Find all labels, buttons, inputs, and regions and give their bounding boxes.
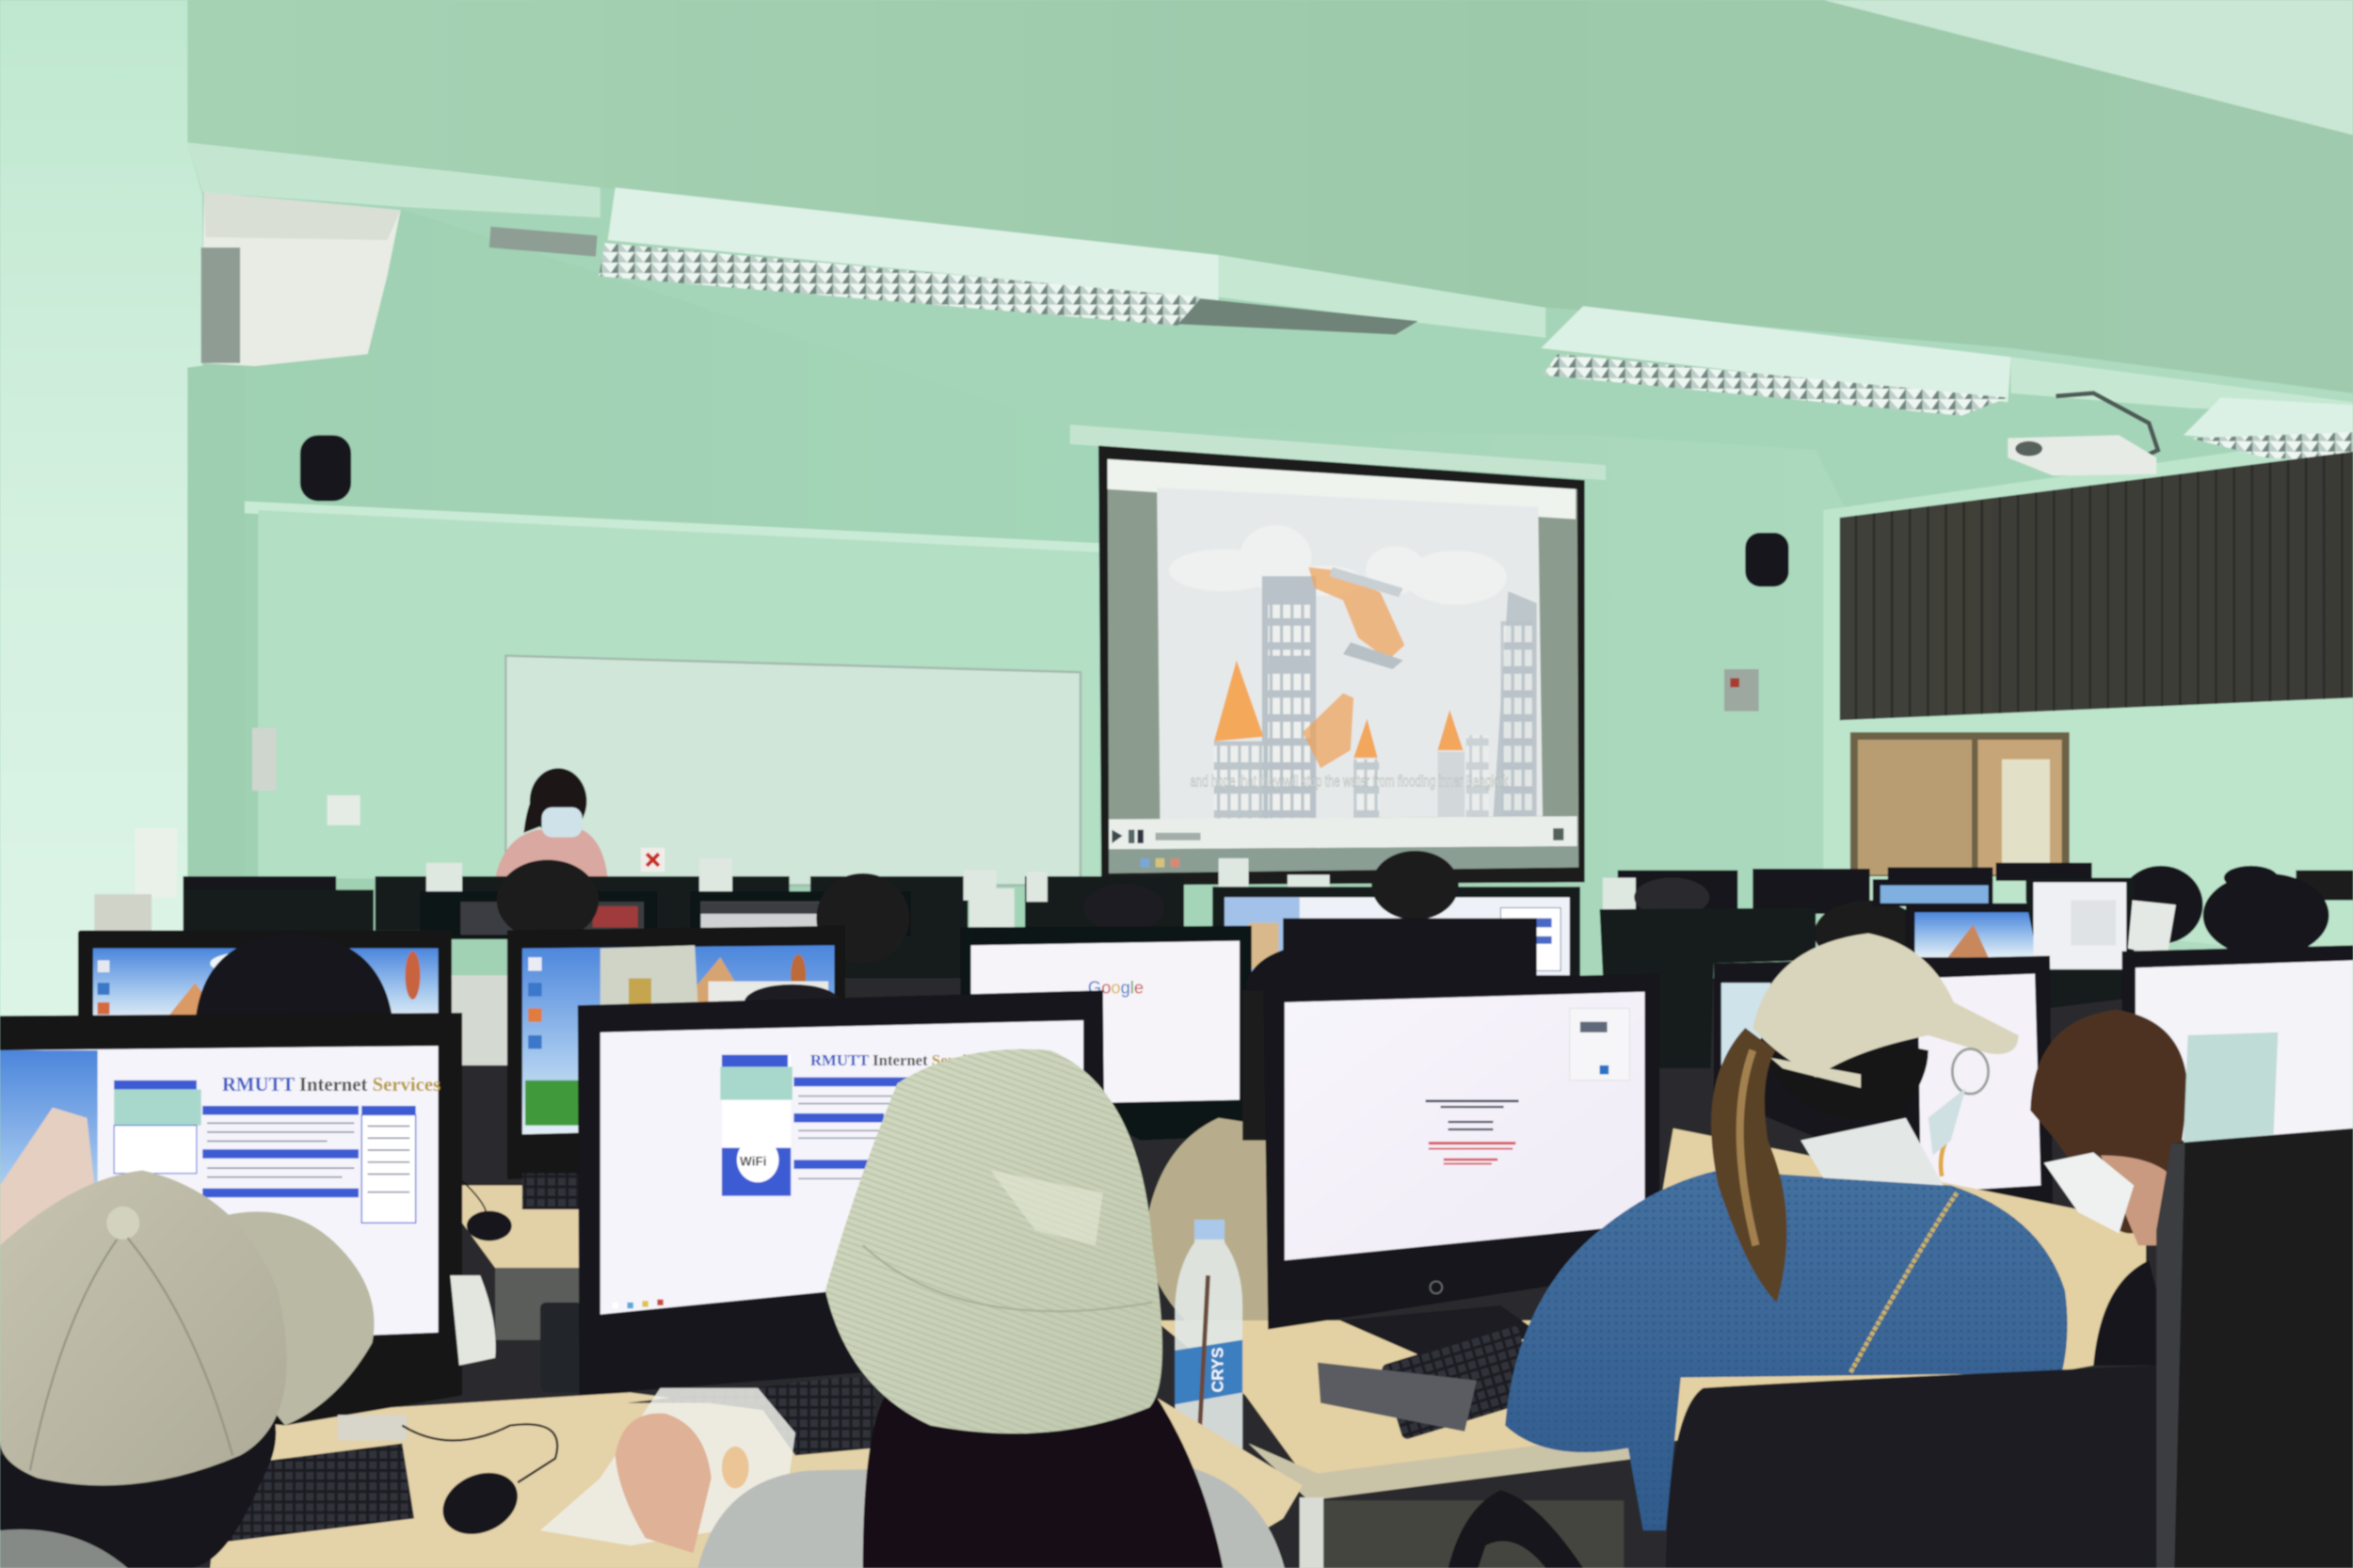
dark hair [0, 1381, 276, 1568]
desk middle left [462, 1185, 579, 1340]
student head behind far left monitor [195, 934, 393, 1023]
wall switch and thermostat [94, 728, 360, 930]
keyboard right desk [1381, 1324, 1540, 1440]
orange helicopter animation [1303, 568, 1404, 768]
student in beige top [1144, 945, 1381, 1320]
monitor row 3 far left desktop [78, 930, 452, 1023]
monitor HP logo [1430, 1281, 1442, 1293]
right column [361, 1115, 416, 1223]
grey shirt [697, 1463, 1285, 1568]
projection housing [1070, 424, 1606, 480]
clouds [1169, 525, 1507, 604]
cap brim [225, 1211, 375, 1426]
hair [1759, 1020, 1929, 1120]
chair front right [1449, 1366, 2161, 1568]
website header text: RMUTT Internet Services [222, 1075, 440, 1096]
person in baseball cap left [0, 1171, 496, 1568]
cap strap [1770, 1058, 1861, 1088]
exam page red text [1429, 1142, 1515, 1164]
ceiling and beam [187, 0, 2353, 510]
paper signs on monitors [426, 858, 1636, 927]
wifi sidebar: WiFi [740, 1155, 767, 1169]
building centre [1262, 576, 1316, 819]
white collar [1801, 1118, 1944, 1185]
person with brown hair and mask [2030, 1010, 2278, 1366]
hand [616, 1414, 712, 1553]
orange roof large [1214, 660, 1263, 819]
projector screen [1098, 445, 1585, 886]
monitor white with form at rear right [2025, 878, 2176, 1008]
cable grommet and cable [338, 1415, 557, 1482]
whiteboard [505, 656, 1080, 886]
grey shirt [0, 1529, 128, 1568]
monitor stand [1340, 1305, 1543, 1358]
door [1850, 732, 2070, 876]
left return wall [187, 360, 245, 878]
video player title bar [1108, 459, 1576, 520]
player controls [1109, 816, 1577, 849]
video frame [1157, 488, 1543, 819]
desk right [1156, 1128, 2146, 1568]
monitor centre with RMUTT page [578, 990, 1141, 1396]
wifi sidebar [720, 1055, 792, 1196]
ceiling light strip 3 [2184, 397, 2353, 462]
monitor desktop at right rear [1873, 879, 2048, 970]
monitor row 2 right web page [1212, 887, 1580, 980]
login box [114, 1080, 201, 1174]
website header text: RMUTT Internet Services [810, 1051, 987, 1069]
monitor row 2 left photoshop [420, 891, 911, 939]
subtitle: and hope that they will stop the water from flooding inner Bangkok [1190, 772, 1509, 790]
cap crown [0, 1171, 287, 1485]
keyboard front left [215, 1444, 414, 1543]
desk front [210, 1388, 1303, 1568]
orange roof right [1437, 710, 1489, 818]
Google logo: Google [1088, 977, 1144, 997]
monitor behind blue person [1714, 956, 2053, 1204]
student head behind centre monitors [744, 984, 840, 1020]
taskbar [1109, 846, 1577, 873]
chair middle [540, 1303, 583, 1392]
ceiling light strip 2 [1541, 306, 2010, 416]
content bars [202, 1106, 416, 1197]
long hair [863, 1373, 1223, 1568]
dark blind panel [1840, 452, 2353, 720]
monitor row 3 Google screen [960, 926, 1252, 1141]
left pillar [0, 0, 202, 1020]
far row of monitors [184, 863, 2353, 982]
lower wall panel [258, 510, 1100, 886]
sweater [1505, 1171, 2067, 1530]
login popup [1570, 1008, 1630, 1080]
person in bucket hat [616, 1049, 1285, 1568]
ceiling light strip 1 [489, 187, 1418, 335]
monitor row 3 desktop with building [507, 926, 846, 1179]
mouse front [433, 1461, 528, 1545]
cap crown [1753, 934, 2018, 1078]
orange roof small [1353, 719, 1379, 819]
speaker right [1745, 533, 1789, 586]
dark under-desk floor area [0, 978, 2353, 1568]
keyboard and mouse middle left [462, 1174, 579, 1240]
foreground monitor back right [2156, 1128, 2353, 1568]
air conditioner [201, 192, 401, 366]
ponytail [1711, 1028, 1786, 1303]
arm [450, 1275, 496, 1366]
keyboard behind hat [627, 1378, 875, 1455]
glasses and mask [1929, 1048, 1989, 1156]
wall trim rail [245, 501, 1100, 555]
water bottle [1175, 1220, 1242, 1474]
monitor far right white [2121, 945, 2353, 1141]
taskbar icons [613, 1300, 664, 1308]
paper note on monitor [2184, 1032, 2278, 1144]
monitor right with exam page [1263, 974, 1659, 1358]
gold chain strap [1850, 1192, 1957, 1373]
exam page text [1426, 1100, 1519, 1130]
dark jacket [2093, 1260, 2176, 1366]
bottle label text: CRYS [1208, 1347, 1226, 1392]
folded grey mask [1318, 1363, 1477, 1432]
content bars [793, 1078, 932, 1169]
projector [2008, 393, 2158, 475]
black monitor backs row 3 [1283, 908, 1816, 1068]
plastic bag [540, 1388, 795, 1545]
student in shirt behind monitor [452, 975, 512, 1065]
content lines [207, 1123, 354, 1177]
bucket hat [825, 1049, 1162, 1433]
person in blue sweater with cap [1505, 934, 2067, 1530]
speaker left [300, 435, 351, 501]
students row 2 heads [497, 851, 2329, 967]
presenter [495, 768, 664, 878]
monitor front left with RMUTT page [0, 1013, 462, 1426]
right side wall [1823, 435, 2353, 960]
wall device box [1724, 669, 1759, 712]
building right [1493, 591, 1537, 818]
